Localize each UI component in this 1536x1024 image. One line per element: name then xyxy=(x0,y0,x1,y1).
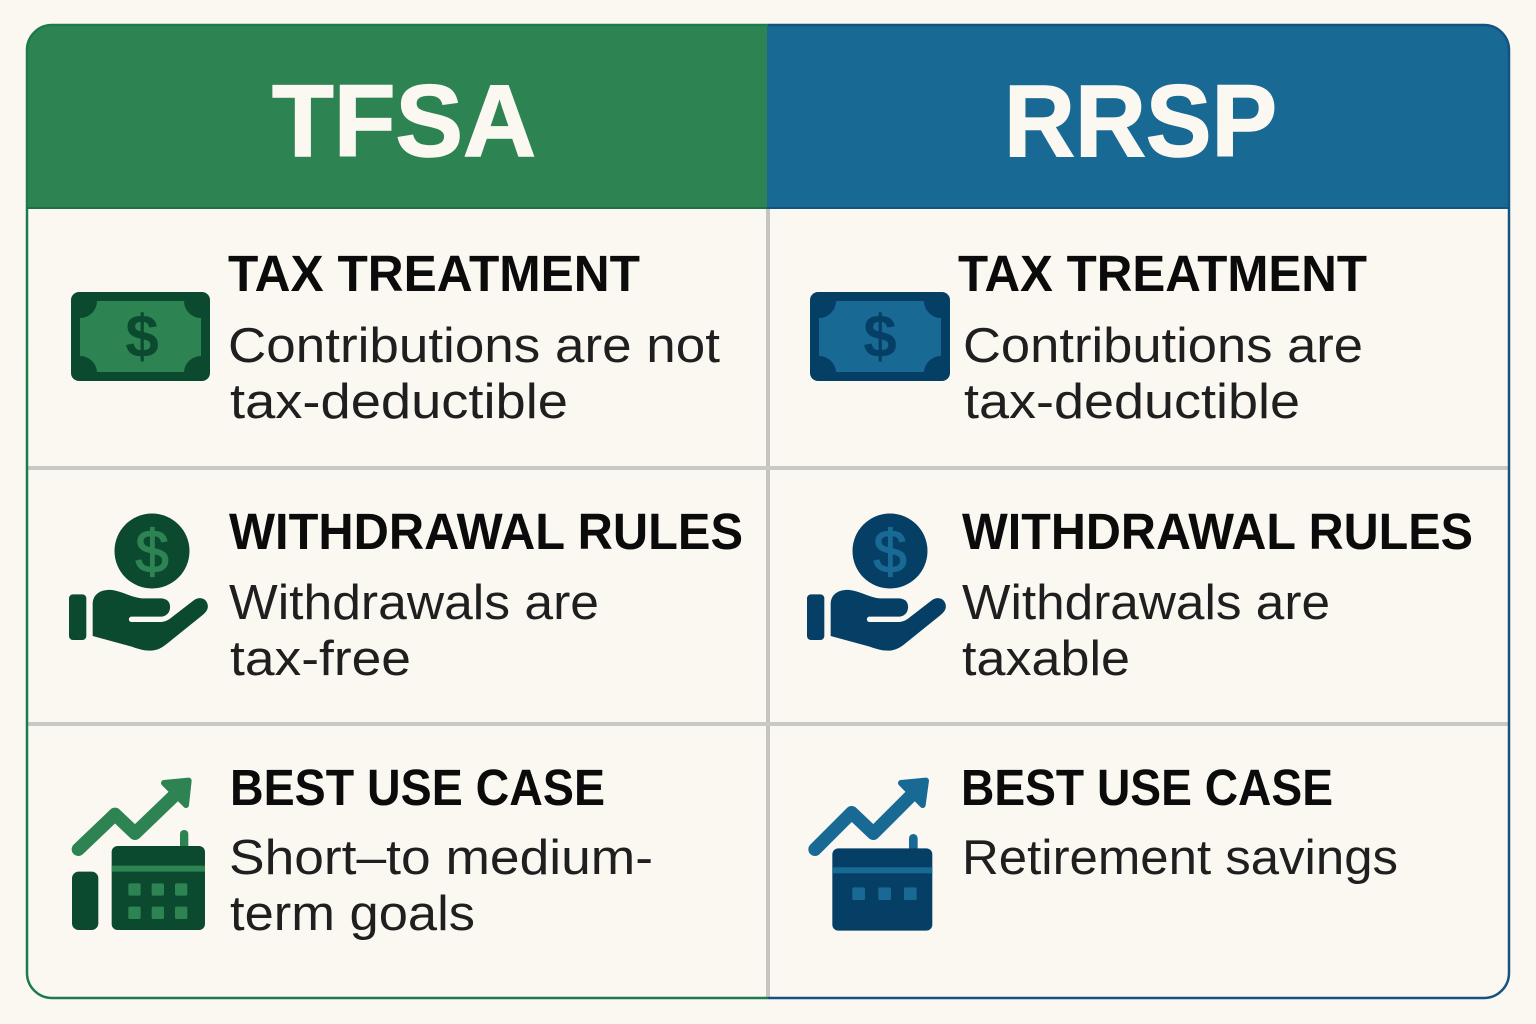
panel: RRSP best use case xyxy=(815,759,1398,931)
heading: tax treatment: TAX TREATMENT xyxy=(228,245,640,302)
header: TFSA green band xyxy=(26,24,767,209)
panel: RRSP tax treatment xyxy=(810,245,1367,429)
text: contributions deductible: tax-deductible xyxy=(964,375,1300,429)
title: RRSP: RRSP xyxy=(1004,64,1277,178)
title: TFSA: TFSA xyxy=(272,64,536,178)
heading: tax treatment: TAX TREATMENT xyxy=(958,245,1367,302)
icon: blue hand holding coin: $ xyxy=(873,518,907,585)
icon: blue hand holding coin xyxy=(807,514,946,651)
icon: green hand holding coin: $ xyxy=(135,518,169,585)
heading: best use case: BEST USE CASE xyxy=(230,759,605,816)
icon: blue banknote: $ xyxy=(863,303,897,370)
text: withdrawals tax-free: tax-free xyxy=(230,632,411,686)
panel: TFSA withdrawal rules xyxy=(69,503,743,686)
icon: green rising arrow and calendar xyxy=(72,781,205,930)
text: short to medium term goals: term goals xyxy=(230,887,475,941)
icon: blue rising arrow and calendar xyxy=(815,781,932,931)
text: short to medium term goals: Short–to medium- xyxy=(229,831,653,885)
panel: TFSA tax treatment xyxy=(71,245,720,429)
text: contributions not deductible: Contributions are not xyxy=(228,319,720,373)
text: contributions deductible xyxy=(963,319,1363,429)
heading: withdrawal rules: WITHDRAWAL RULES xyxy=(962,503,1473,560)
icon: blue banknote xyxy=(810,292,950,381)
icon: green banknote xyxy=(71,292,210,381)
text: withdrawals taxable: taxable xyxy=(962,632,1130,686)
text: withdrawals taxable xyxy=(962,576,1330,686)
header: RRSP blue band xyxy=(767,24,1510,209)
text: contributions not deductible xyxy=(228,319,720,429)
panel: TFSA best use case xyxy=(72,759,653,941)
icon: green banknote: $ xyxy=(125,303,159,370)
text: withdrawals tax-free: Withdrawals are xyxy=(229,576,599,630)
text: withdrawals tax-free xyxy=(229,576,599,686)
icon: green hand holding coin xyxy=(69,514,208,651)
panel: RRSP withdrawal rules xyxy=(807,503,1473,686)
text: contributions deductible: Contributions are xyxy=(963,319,1363,373)
heading: withdrawal rules: WITHDRAWAL RULES xyxy=(229,503,743,560)
text: contributions not deductible: tax-deductible xyxy=(230,375,568,429)
text: short to medium term goals xyxy=(229,831,653,941)
heading: best use case: BEST USE CASE xyxy=(961,759,1333,816)
text: withdrawals taxable: Withdrawals are xyxy=(962,576,1330,630)
text: retirement savings: Retirement savings xyxy=(962,831,1398,885)
